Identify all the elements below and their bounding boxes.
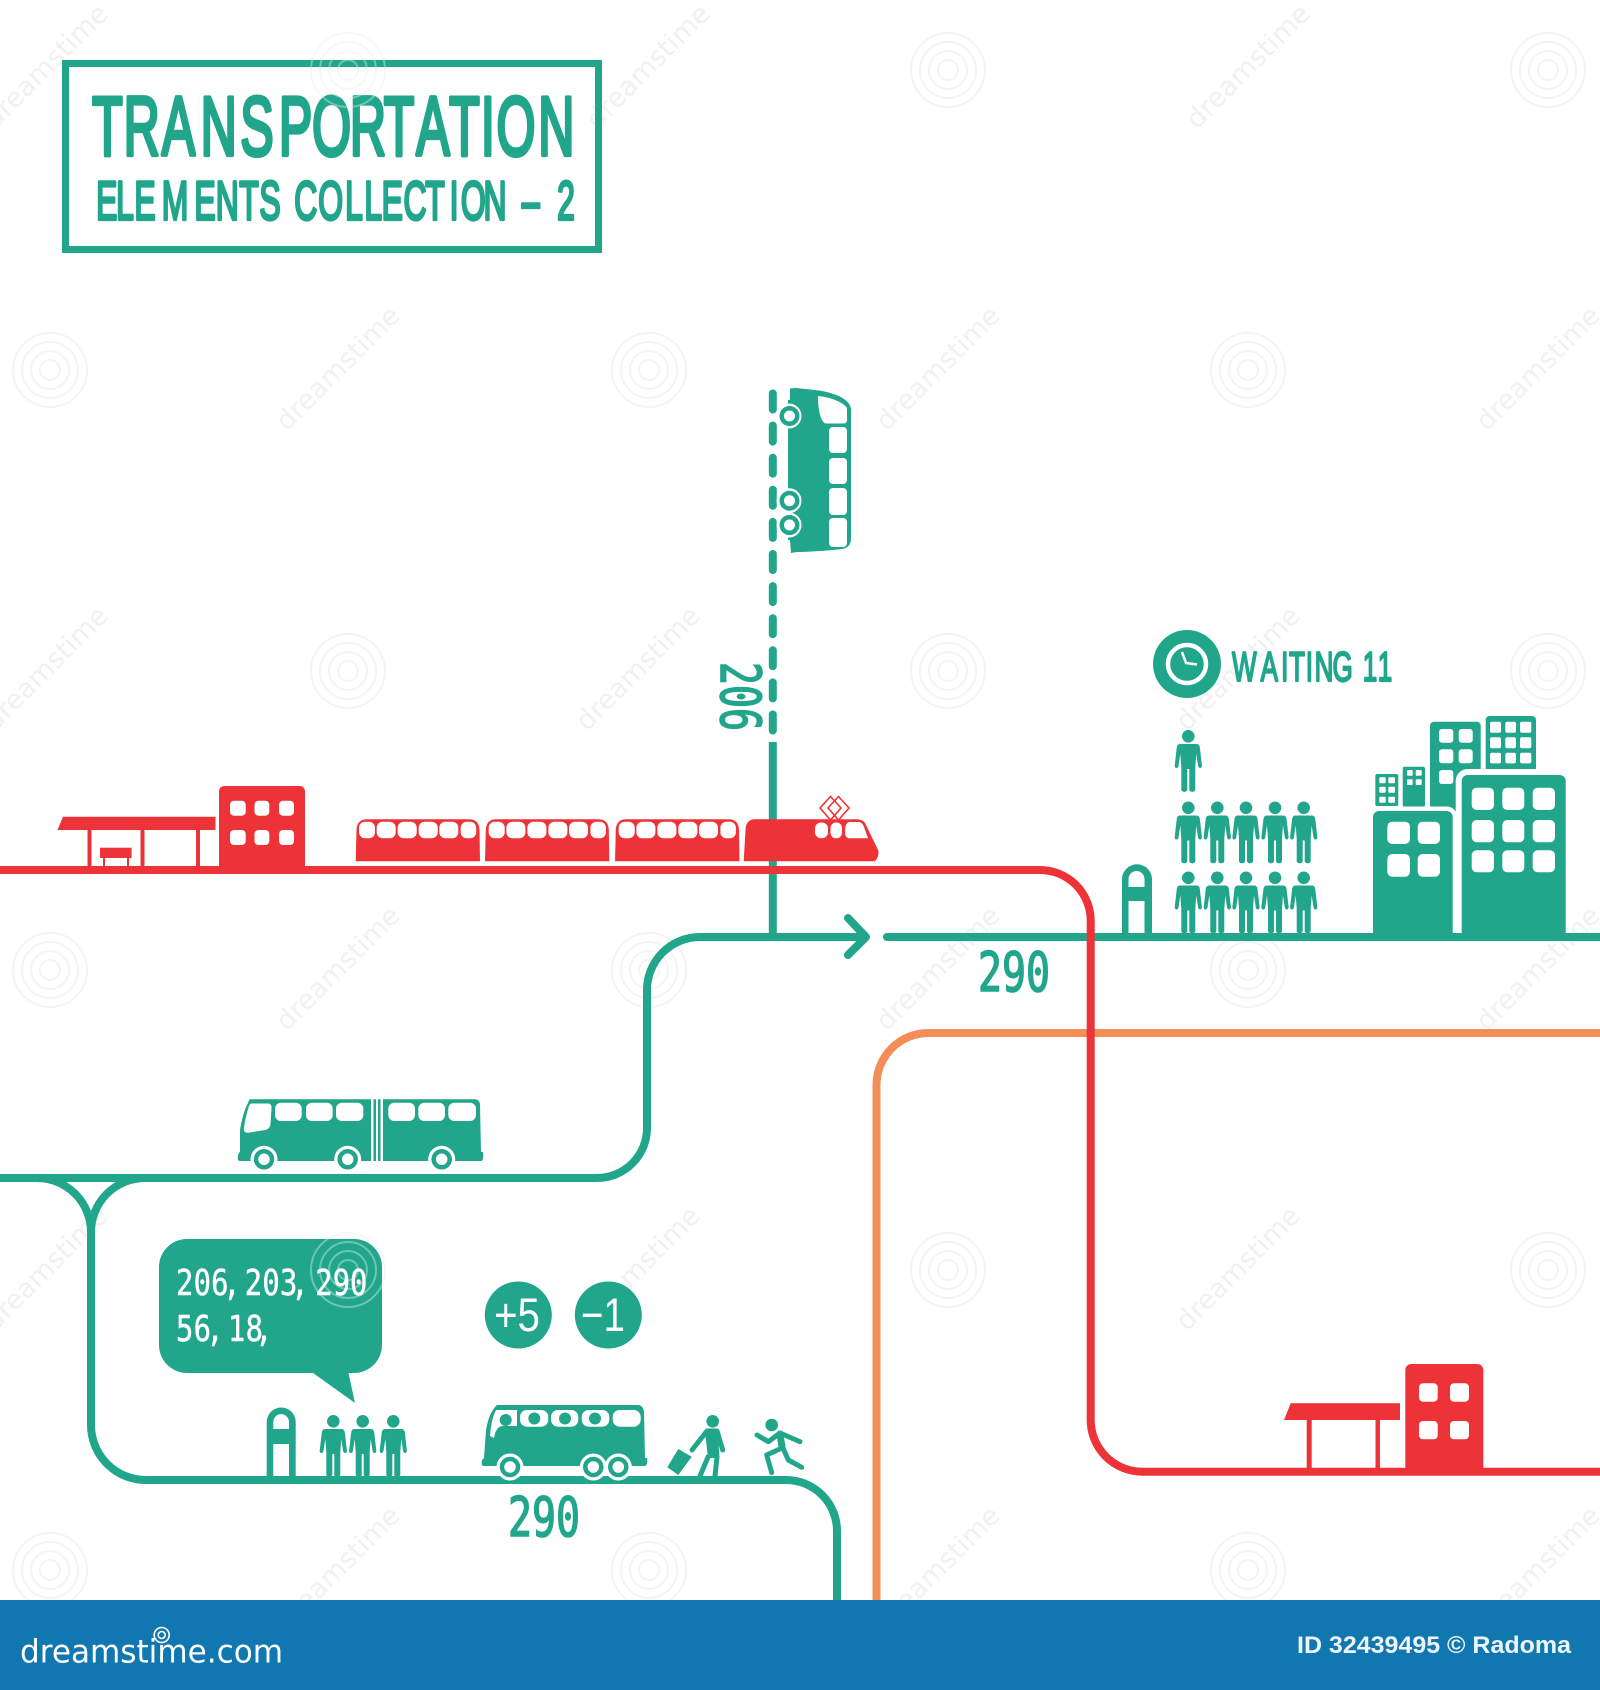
teal lower route with junction — [37, 1178, 837, 1600]
icon: station bottom right — [1284, 1364, 1483, 1472]
text: dreamstime — [570, 600, 707, 737]
badge: minus one — [575, 1282, 642, 1348]
text: dreamstime — [1170, 1200, 1307, 1337]
text: dreamstime — [580, 0, 717, 135]
route list line 2: 56, 18, — [176, 1308, 273, 1350]
title box — [66, 64, 598, 250]
footer brand spiral icon — [154, 1628, 169, 1642]
text: dreamstime — [270, 1500, 407, 1637]
text: dreamstime — [270, 300, 407, 437]
icon: station top left — [58, 786, 305, 869]
route label 290 lower: 290 — [508, 1486, 580, 1549]
text: dreamstime — [870, 300, 1007, 437]
badge: minus one: −1 — [581, 1288, 625, 1341]
title heading: TRANSPORTATION — [92, 80, 574, 173]
train car 2 — [485, 819, 609, 861]
orange route line — [876, 1033, 1600, 1600]
building small middle — [1403, 767, 1425, 807]
building back grid — [1486, 716, 1536, 776]
train car 1 — [356, 819, 480, 861]
building back tall — [1430, 722, 1481, 812]
icon: three waiting passengers — [320, 1415, 407, 1477]
route label 290 right: 290 — [978, 941, 1050, 1004]
icon: vertical bus — [776, 388, 851, 553]
text: dreamstime — [870, 1500, 1007, 1637]
train windows — [359, 822, 868, 838]
teal main route line with arrow — [0, 918, 1600, 1178]
icon: passenger bus — [482, 1405, 647, 1480]
subtitle: ELEMENTS COLLECTION – 2 — [96, 169, 575, 232]
icon: crowd of waiting people — [1175, 730, 1317, 933]
speech bubble with route numbers — [159, 1239, 382, 1403]
icon: city buildings — [1373, 716, 1566, 936]
icon: red train — [356, 796, 879, 861]
icon: articulated bus — [238, 1099, 483, 1173]
teal solid branch line — [769, 742, 777, 937]
footer brand: dreamstime.com — [20, 1632, 283, 1670]
text: dreamstime — [1180, 0, 1317, 135]
route label 206: 206 — [708, 662, 772, 731]
text: dreamstime — [270, 900, 407, 1037]
train car 3 — [615, 819, 740, 861]
footer bar — [0, 1600, 1600, 1690]
building small left — [1375, 774, 1398, 806]
text: dreamstime — [870, 900, 1007, 1037]
building front left — [1373, 811, 1453, 936]
red route line — [0, 870, 1600, 1472]
waiting label: WAITING 11 — [1232, 644, 1392, 691]
teal baseline repaint — [1096, 933, 1600, 941]
icon: bus stop sign lower — [267, 1408, 296, 1478]
teal dashed branch line — [769, 394, 777, 742]
icon: waiting clock — [1153, 630, 1221, 698]
footer image id: ID 32439495 © Radoma — [1297, 1632, 1572, 1659]
icon: bus stop sign right — [1122, 864, 1152, 938]
route list line 1: 206, 203, 290 — [176, 1262, 367, 1304]
building front right — [1462, 775, 1566, 936]
icon: traveller with suitcase — [667, 1415, 723, 1476]
train engine — [744, 819, 879, 861]
badge: plus five — [485, 1282, 552, 1348]
text: dreamstime — [1170, 600, 1307, 737]
train pantograph — [820, 796, 849, 820]
text: dreamstime — [570, 1200, 707, 1337]
icon: running person — [757, 1419, 802, 1473]
badge: plus five: +5 — [494, 1288, 540, 1341]
